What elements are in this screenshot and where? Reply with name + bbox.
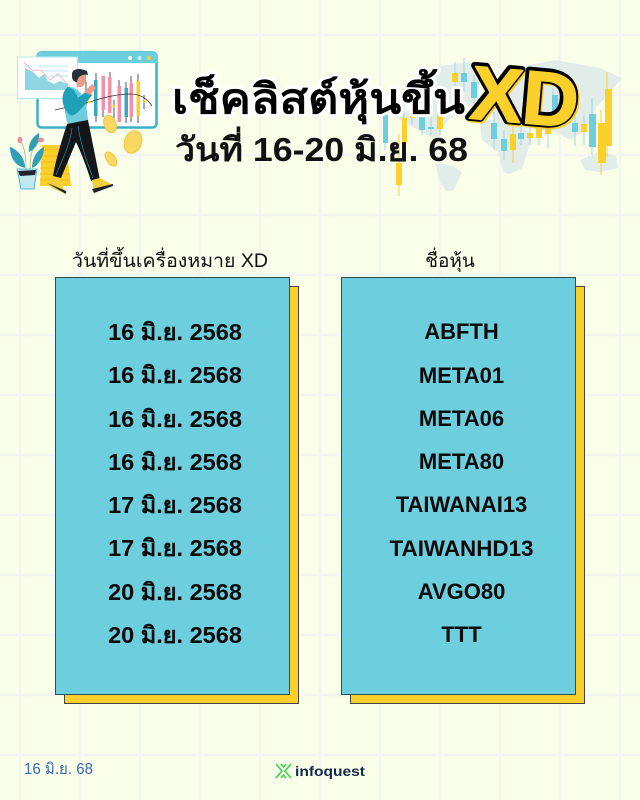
date rows: 17 มิ.ย. 2568 bbox=[108, 492, 242, 518]
illustration: investor with stock chart and coins bbox=[10, 52, 157, 194]
date rows: 20 มิ.ย. 2568 bbox=[108, 579, 242, 605]
small area chart card bbox=[18, 57, 78, 98]
stock rows: TAIWANHD13 bbox=[390, 536, 534, 561]
logo: infoquest: infoquest bbox=[295, 763, 365, 779]
XD badge: XD bbox=[468, 52, 583, 146]
date rows: 17 มิ.ย. 2568 bbox=[108, 535, 242, 561]
date rows: 16 มิ.ย. 2568 bbox=[108, 406, 242, 432]
stock rows: META01 bbox=[419, 363, 504, 388]
date rows: 16 มิ.ย. 2568 bbox=[108, 319, 242, 345]
footer date: 16 มิ.ย. 68 bbox=[24, 761, 93, 778]
XD badge: XD bbox=[467, 51, 582, 145]
panel: stock names bbox=[342, 278, 584, 704]
chart window bbox=[37, 52, 157, 128]
plant bbox=[10, 133, 44, 189]
logo mark bbox=[276, 764, 291, 778]
stock rows: TTT bbox=[441, 622, 482, 647]
stock rows: AVGO80 bbox=[418, 579, 505, 604]
illustration: world map with candlesticks bbox=[383, 58, 622, 196]
subtitle: วันที่ 16-20 มิ.ย. 68 bbox=[175, 126, 468, 168]
title: เช็คลิสต์หุ้นขึ้น bbox=[172, 69, 465, 125]
title bbox=[172, 49, 583, 168]
date rows: 16 มิ.ย. 2568 bbox=[108, 449, 242, 475]
stock rows bbox=[390, 319, 534, 647]
date rows: 16 มิ.ย. 2568 bbox=[108, 362, 242, 388]
column heading: XD date: วันที่ขึ้นเครื่องหมาย XD bbox=[72, 247, 268, 272]
gold coins bbox=[101, 113, 145, 168]
date rows bbox=[108, 319, 242, 648]
panel: dates bbox=[56, 278, 298, 704]
date rows: 20 มิ.ย. 2568 bbox=[108, 622, 242, 648]
stock rows: ABFTH bbox=[424, 319, 499, 344]
stock rows: META06 bbox=[419, 406, 504, 431]
column heading: stock name: ชื่อหุ้น bbox=[425, 247, 475, 273]
stock rows: TAIWANAI13 bbox=[396, 492, 527, 517]
coin stack bbox=[40, 145, 71, 186]
XD badge: XD bbox=[466, 49, 581, 144]
stock rows: META80 bbox=[419, 449, 504, 474]
person bbox=[47, 69, 113, 194]
